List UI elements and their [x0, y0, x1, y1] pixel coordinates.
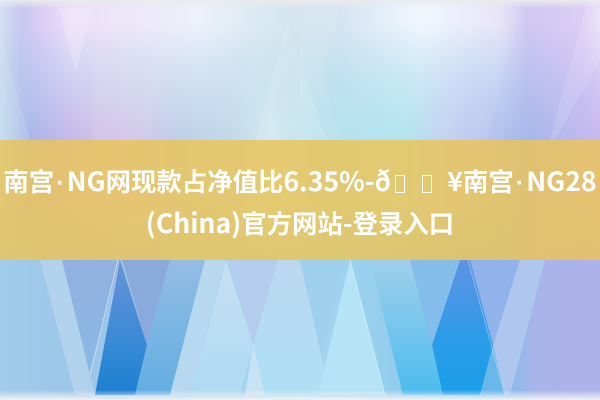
- lower facets: strips and triangles: [40, 260, 545, 395]
- thin highlight lines: [90, 260, 505, 395]
- title text: 南宫·NG网现款占净值比6.35%-ð ¥南宫·NG28: [3, 160, 597, 199]
- lower facets: dark diamonds: [95, 260, 493, 395]
- title text: (China)官方网站-登录入口: [146, 202, 454, 241]
- upper facets: [0, 8, 600, 140]
- title text: [3, 160, 597, 241]
- yellow title band: [0, 140, 600, 260]
